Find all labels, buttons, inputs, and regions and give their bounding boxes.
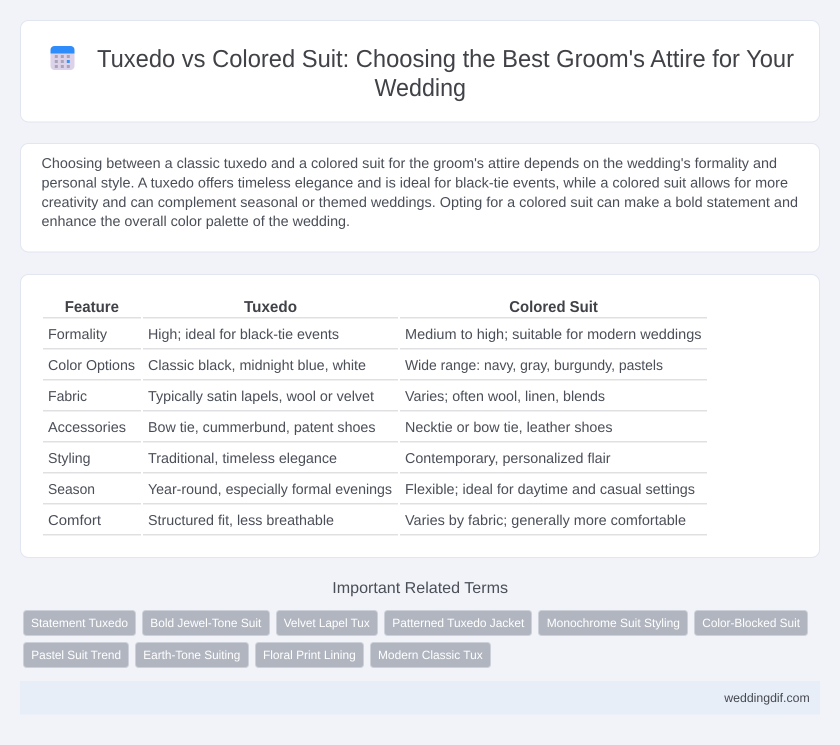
table row: styling: Contemporary, personalized flair <box>405 451 611 467</box>
table row: fabric: Fabric <box>48 389 87 405</box>
tag: velvet lapel tux <box>276 610 378 636</box>
table row: formality <box>43 327 707 350</box>
intro paragraph: creativity and can complement seasonal or themed weddings. Opting for a colored suit can make a bold statement and <box>42 195 798 211</box>
tag: floral print lining <box>256 642 364 668</box>
tag: velvet lapel tux: Velvet Lapel Tux <box>284 616 370 630</box>
table row: fabric <box>43 389 707 412</box>
table row: formality: Medium to high; suitable for modern weddings <box>405 327 702 343</box>
table row: comfort: Comfort <box>48 513 101 529</box>
panel: introduction <box>20 144 820 252</box>
table row: season: Year-round, especially formal evenings <box>148 482 392 498</box>
tag: bold jewel-tone suit: Bold Jewel-Tone Suit <box>150 616 262 630</box>
table row: color options: Color Options <box>48 358 135 374</box>
table row: formality: High; ideal for black-tie events <box>148 327 339 343</box>
table header row: Tuxedo <box>244 299 297 316</box>
table row: season: Season <box>48 482 95 498</box>
table row: color options: Classic black, midnight blue, white <box>148 358 366 374</box>
intro paragraph: enhance the overall color palette of the wedding. <box>42 214 350 230</box>
table row: season <box>43 482 707 504</box>
tag: pastel suit trend <box>24 642 128 668</box>
table row: accessories <box>43 420 707 442</box>
tag: statement tuxedo <box>24 610 136 636</box>
tag: bold jewel-tone suit <box>142 610 270 636</box>
heading: important related terms: Important Related Terms <box>332 580 508 597</box>
tag: color-blocked suit: Color-Blocked Suit <box>702 616 801 630</box>
table row: styling: Styling <box>48 451 91 467</box>
table row: accessories: Bow tie, cummerbund, patent shoes <box>148 420 376 436</box>
tag: patterned tuxedo jacket: Patterned Tuxedo Jacket <box>392 616 525 630</box>
tag: pastel suit trend: Pastel Suit Trend <box>31 648 121 662</box>
footer bar <box>20 681 820 714</box>
table row: fabric: Varies; often wool, linen, blends <box>405 389 605 405</box>
table row: comfort: Structured fit, less breathable <box>148 513 334 529</box>
tag: color-blocked suit <box>694 610 808 636</box>
intro paragraph: Choosing between a classic tuxedo and a colored suit for the groom's attire depends on the wedding's formality and <box>42 156 777 172</box>
table header row: Colored Suit <box>509 299 598 316</box>
table row: fabric: Typically satin lapels, wool or velvet <box>148 389 374 405</box>
tag: statement tuxedo: Statement Tuxedo <box>31 616 128 630</box>
table header row <box>43 299 707 318</box>
panel: title header <box>20 20 820 122</box>
tag: monochrome suit styling <box>538 610 688 636</box>
icon: calendar <box>50 46 74 70</box>
table row: comfort: Varies by fabric; generally more comfortable <box>405 513 686 529</box>
table row: accessories: Accessories <box>48 420 126 436</box>
tag: monochrome suit styling: Monochrome Suit Styling <box>547 616 680 630</box>
table row: season: Flexible; ideal for daytime and casual settings <box>405 482 695 498</box>
table row: styling: Traditional, timeless elegance <box>148 451 337 467</box>
title: Wedding <box>374 75 466 102</box>
tag: floral print lining: Floral Print Lining <box>263 648 356 662</box>
footer site name: weddingdif.com <box>723 691 810 705</box>
related term tags <box>24 610 808 668</box>
table row: color options <box>43 358 707 380</box>
title <box>97 46 794 102</box>
table row: accessories: Necktie or bow tie, leather shoes <box>405 420 612 436</box>
tag: modern classic tux <box>370 642 490 668</box>
intro paragraph <box>42 156 798 230</box>
tag: patterned tuxedo jacket <box>384 610 532 636</box>
table header row: Feature <box>65 299 119 316</box>
tag: earth-tone suiting: Earth-Tone Suiting <box>143 648 240 662</box>
panel: comparison table <box>20 274 820 558</box>
table row: styling <box>43 451 707 474</box>
title: Tuxedo vs Colored Suit: Choosing the Best Groom's Attire for Your <box>97 46 794 73</box>
table row: formality: Formality <box>48 327 108 343</box>
intro paragraph: personal style. A tuxedo offers timeless elegance and is ideal for black-tie events, while a colored suit allows for more <box>42 176 788 192</box>
tag: earth-tone suiting <box>136 642 248 668</box>
tag: modern classic tux: Modern Classic Tux <box>378 648 483 662</box>
table row: comfort <box>43 513 707 536</box>
table row: color options: Wide range: navy, gray, burgundy, pastels <box>405 358 663 374</box>
